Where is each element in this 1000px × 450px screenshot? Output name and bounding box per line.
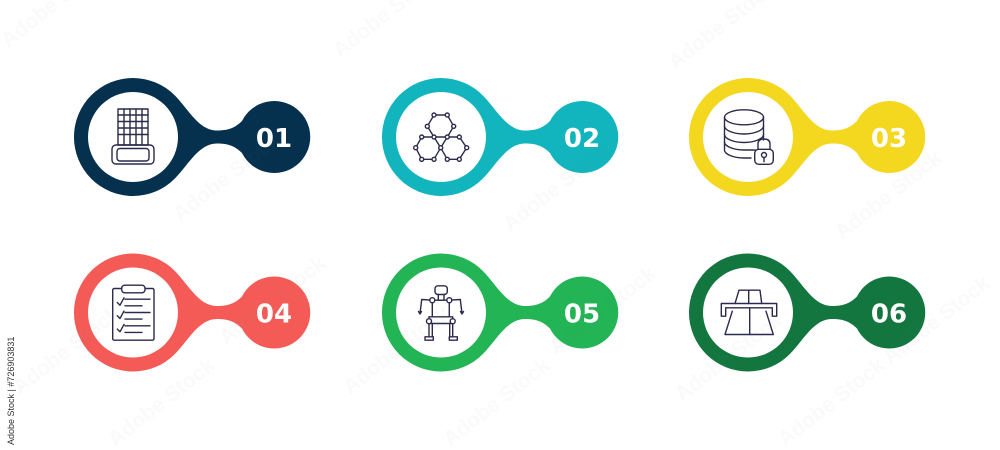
watermark: Adobe Stock bbox=[104, 354, 219, 450]
watermark: Adobe Stock bbox=[9, 302, 124, 399]
step 03: locked database bbox=[689, 78, 925, 196]
watermark: Adobe Stock bbox=[215, 252, 330, 349]
step 02: molecule hexagons: 02 bbox=[564, 124, 600, 154]
watermark: Adobe Stock bbox=[169, 129, 284, 226]
step 02: molecule hexagons bbox=[382, 78, 618, 196]
step 06: motorway overpass: 06 bbox=[871, 300, 907, 330]
step 01: solar panel bbox=[74, 78, 310, 196]
step 05: robot skeleton: 05 bbox=[564, 300, 600, 330]
step 04: checklist clipboard bbox=[74, 254, 310, 372]
watermark: Adobe Stock bbox=[879, 272, 994, 369]
stock id credit: Adobe Stock | #726903831 bbox=[6, 337, 16, 445]
step 06: motorway overpass bbox=[689, 254, 925, 372]
step 05: robot skeleton bbox=[382, 254, 618, 372]
watermark: Adobe Stock bbox=[545, 262, 660, 359]
watermark: Adobe Stock bbox=[499, 139, 614, 236]
step 03: locked database: 03 bbox=[871, 124, 907, 154]
watermark: Adobe Stock bbox=[831, 147, 946, 244]
watermark: Adobe Stock bbox=[339, 302, 454, 399]
step 01: solar panel: 01 bbox=[256, 124, 292, 154]
watermark: Adobe Stock bbox=[439, 354, 554, 450]
watermark: Adobe Stock bbox=[774, 354, 889, 450]
watermark: Adobe Stock bbox=[671, 309, 786, 406]
step 04: checklist clipboard: 04 bbox=[256, 300, 292, 330]
